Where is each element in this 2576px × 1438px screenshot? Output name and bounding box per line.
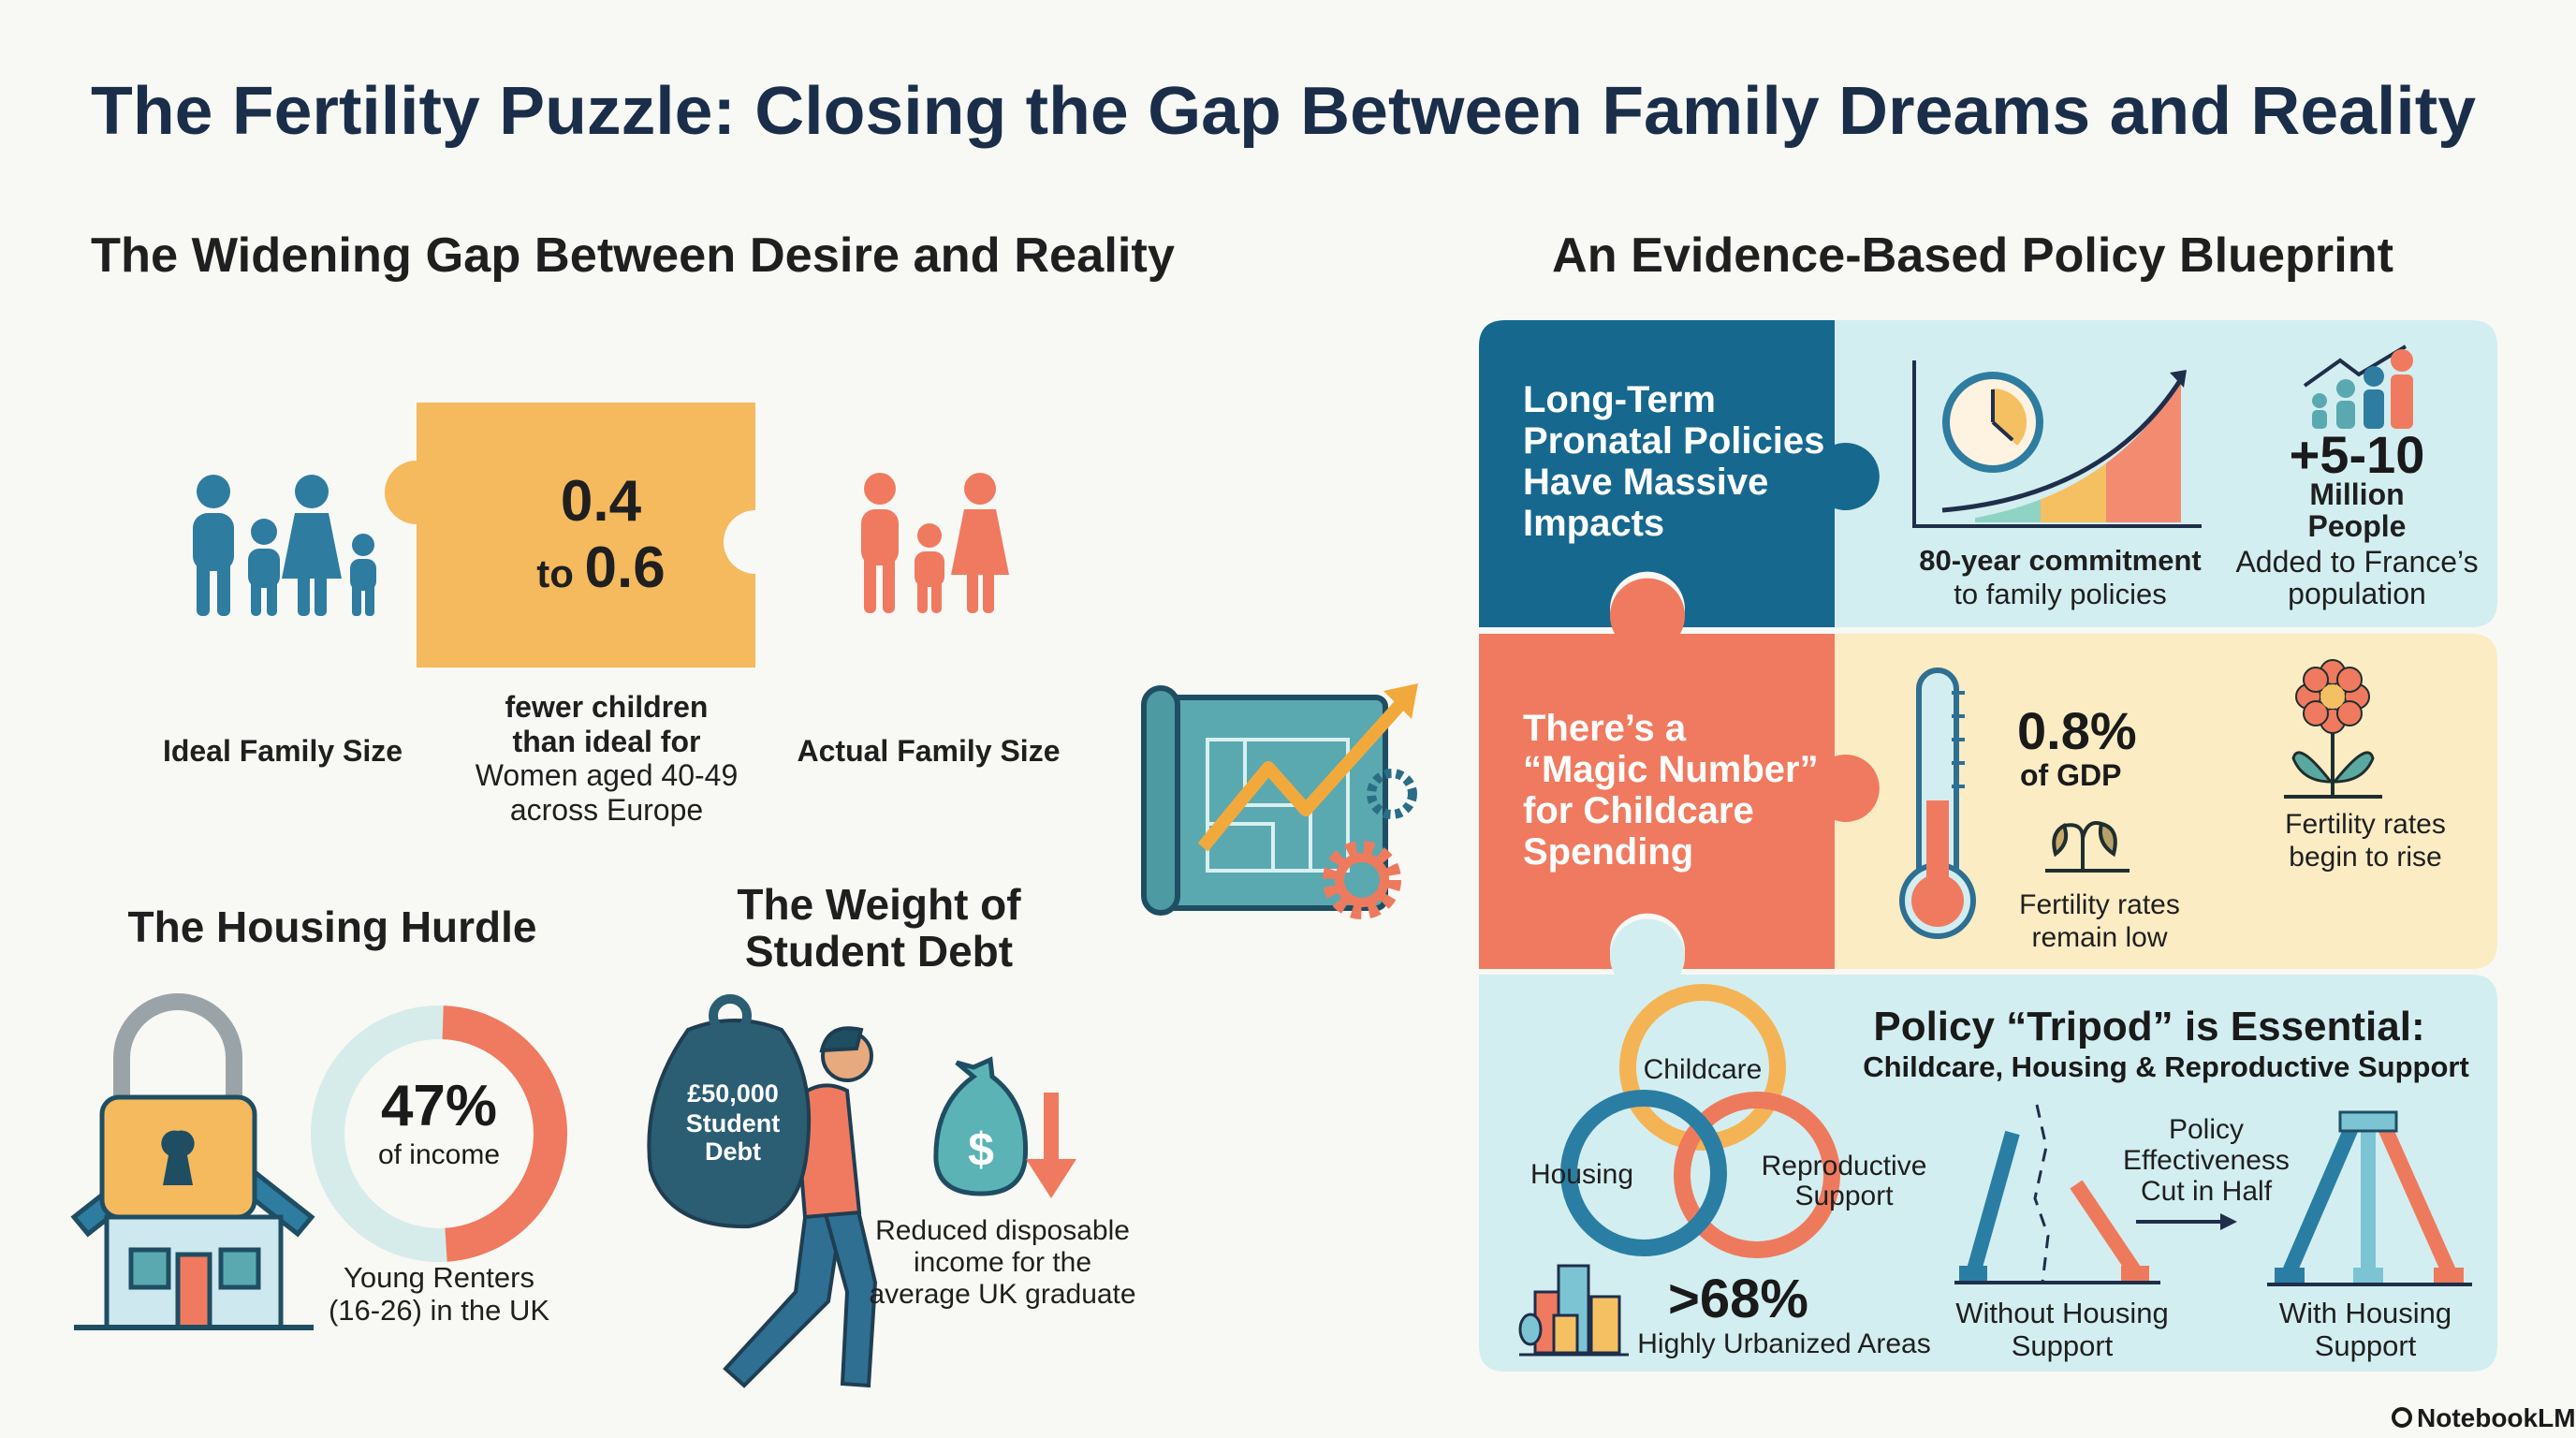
text: policy effectiveness cut in half: Policy — [2169, 1114, 2244, 1145]
heading: student debt — [737, 880, 1021, 976]
icon: wilting sprout — [2045, 823, 2130, 871]
panel row 2: childcare magic number: begin to rise — [2289, 842, 2442, 873]
text: young renters: (16-26) in the UK — [329, 1294, 549, 1327]
text: policy effectiveness cut in half: Effectiveness — [2123, 1145, 2290, 1176]
panel row 2: childcare magic number: Spending — [1523, 831, 1693, 873]
panel row 2: childcare magic number: remain low — [2031, 922, 2168, 953]
puzzle piece: 0.4 to 0.6 — [385, 403, 755, 668]
title: The Fertility Puzzle: Closing the Gap Between Family Dreams and Reality — [91, 74, 2476, 149]
label: actual family size: Actual Family Size — [798, 734, 1060, 768]
text: young renters: Young Renters — [344, 1261, 534, 1294]
text: reduced disposable income: average UK graduate — [869, 1279, 1136, 1310]
text: reduced disposable income: income for the — [914, 1247, 1091, 1278]
panel row 1: long-term policies: People — [2308, 509, 2406, 543]
panel row 3: policy tripod: Childcare, Housing & Reproductive Support — [1863, 1050, 2469, 1083]
panel row 1: long-term policies: Long-Term — [1523, 379, 1716, 420]
panel row 2: childcare magic number: Fertility rates — [2019, 889, 2180, 920]
icon: person with debt backpack: Debt — [705, 1137, 761, 1166]
panel row 1: long-term policies: Impacts — [1523, 503, 1664, 544]
diagram: three interlocking rings: Childcare — [1644, 1054, 1762, 1085]
panel: policy blueprint — [1479, 320, 2497, 1372]
panel row 1: long-term policies: +5-10 — [2290, 425, 2424, 484]
panel row 1: long-term policies: Added to France’s — [2235, 545, 2479, 579]
panel row 3: policy tripod: Support — [2012, 1329, 2114, 1362]
diagram: broken tripod — [1954, 1105, 2160, 1283]
text: young renters — [329, 1261, 549, 1327]
icon: person with debt backpack: Student — [686, 1109, 780, 1137]
icon: money bag with down arrow: $ — [968, 1123, 994, 1176]
panel row 2: childcare magic number: Fertility rates — [2285, 809, 2446, 840]
arrow — [2136, 1213, 2237, 1230]
text: policy effectiveness cut in half — [2123, 1114, 2290, 1207]
panel row 2: childcare magic number: “Magic Number” — [1523, 749, 1819, 790]
panel row 2: childcare magic number: of GDP — [2020, 758, 2121, 792]
chart: growth curve with clock — [1914, 356, 2202, 526]
panel row 1: long-term policies: population — [2288, 577, 2426, 610]
text: reduced disposable income — [869, 1215, 1136, 1310]
panel row 1: long-term policies: 80-year commitment — [1919, 544, 2202, 577]
text: fewer children: Women aged 40-49 — [476, 758, 738, 792]
heading: widening gap: The Widening Gap Between Desire and Reality — [91, 228, 1175, 283]
diagram: three interlocking rings: Support — [1794, 1181, 1894, 1211]
icon: person with debt backpack: £50,000 — [687, 1079, 779, 1108]
text: fewer children: across Europe — [510, 793, 703, 827]
panel row 2: childcare magic number — [1479, 579, 2497, 969]
panel row 3: policy tripod: Without Housing — [1955, 1297, 2169, 1329]
heading: policy tripod: Policy “Tripod” is Essential: — [1873, 1004, 2425, 1049]
panel row 1: long-term policies: Pronatal Policies — [1523, 420, 1824, 462]
icon: city buildings — [1519, 1266, 1629, 1355]
icon: actual family (red) — [861, 473, 1009, 613]
label: ideal family size: Ideal Family Size — [163, 734, 402, 768]
text: fewer children: than ideal for — [513, 725, 700, 758]
icon: person with debt backpack — [649, 999, 875, 1386]
diagram: three interlocking rings: Reproductive — [1762, 1151, 1926, 1181]
puzzle piece: 0.4 to 0.6: to 0.6 — [536, 536, 666, 600]
diagram: three interlocking rings: Housing — [1530, 1159, 1633, 1190]
icon: people with growth arrow — [2305, 346, 2413, 429]
icon: blueprint — [1144, 683, 1418, 913]
panel row 1: long-term policies — [1479, 320, 2497, 627]
icon: money bag with down arrow — [936, 1060, 1076, 1198]
puzzle piece: 0.4 to 0.6: 0.4 — [561, 469, 642, 534]
diagram: full tripod — [2267, 1112, 2472, 1284]
heading: housing hurdle: The Housing Hurdle — [127, 902, 537, 951]
text: fewer children: fewer children — [505, 690, 708, 724]
panel row 3: policy tripod — [1479, 919, 2497, 1372]
panel row 3: policy tripod: With Housing — [2279, 1297, 2452, 1329]
diagram: three interlocking rings — [1530, 992, 1926, 1250]
panel row 2: childcare magic number: for Childcare — [1523, 790, 1754, 831]
panel row 2: childcare magic number: 0.8% — [2017, 701, 2137, 760]
chart: donut 47% of income — [324, 1019, 554, 1249]
panel row 3: policy tripod: Support — [2315, 1329, 2417, 1362]
heading: student debt: The Weight of — [737, 880, 1021, 929]
panel row 2: childcare magic number: There’s a — [1523, 708, 1687, 749]
icon: locked house — [74, 1002, 314, 1328]
text: policy effectiveness cut in half: Cut in Half — [2141, 1176, 2273, 1207]
panel row 1: long-term policies: to family policies — [1954, 578, 2167, 610]
icon: thermometer — [1902, 670, 1973, 936]
panel row 1: long-term policies: Have Massive — [1523, 462, 1768, 503]
heading: policy blueprint: An Evidence-Based Policy Blueprint — [1552, 228, 2393, 283]
text: fewer children — [476, 690, 738, 827]
text: reduced disposable income: Reduced disposable — [875, 1215, 1130, 1246]
heading: student debt: Student Debt — [745, 927, 1013, 976]
icon: ideal family (blue) — [193, 475, 376, 616]
panel row 1: long-term policies: Million — [2309, 477, 2405, 511]
chart: donut 47% of income: 47% — [381, 1074, 497, 1138]
panel row 3: policy tripod: >68% — [1668, 1269, 1808, 1329]
logo: NotebookLM: NotebookLM — [2417, 1403, 2576, 1432]
panel row 3: policy tripod: Highly Urbanized Areas — [1637, 1328, 1931, 1359]
chart: donut 47% of income: of income — [378, 1139, 500, 1170]
icon: flower — [2284, 660, 2382, 797]
